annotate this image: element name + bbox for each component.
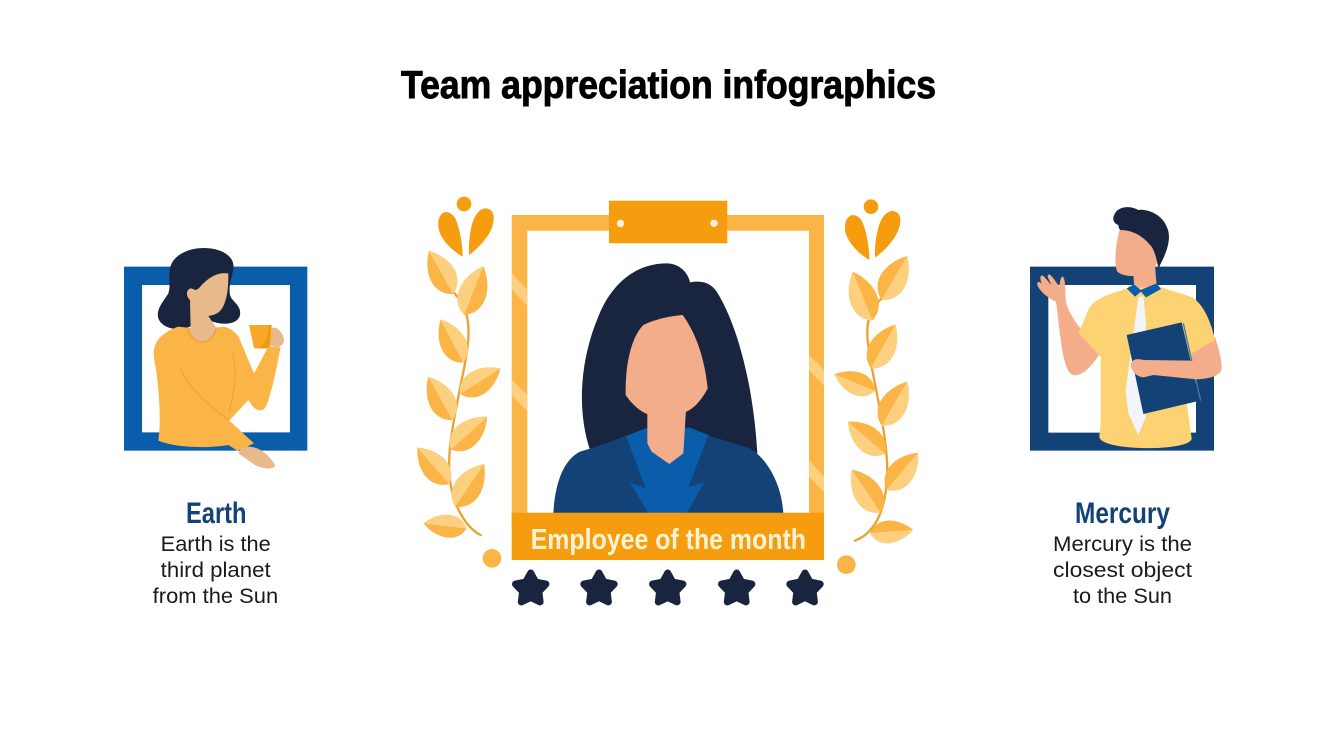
text block: Earth description: from the Sun <box>153 585 278 608</box>
text block: Earth description: Earth is the <box>161 533 271 556</box>
text block: Earth description <box>153 533 278 608</box>
panel: Mercury <box>1030 207 1222 608</box>
panel: Earth <box>124 248 307 608</box>
illustration: woman with cup in frame <box>124 248 307 469</box>
five star rating <box>516 573 820 602</box>
illustration: man with folder in frame <box>1030 207 1222 451</box>
left laurel wreath <box>408 197 507 568</box>
clip at top of frame <box>609 201 727 243</box>
text block: Mercury description <box>1053 533 1192 608</box>
text block: Mercury description: closest object <box>1053 559 1192 582</box>
illustration: employee portrait <box>553 263 783 513</box>
text block: Earth description: third planet <box>161 559 271 582</box>
title: Team appreciation infographics <box>401 64 936 107</box>
heading: Mercury: Mercury <box>1075 497 1170 530</box>
panel: Employee of the month <box>408 197 928 602</box>
banner: Employee of the month <box>531 524 806 556</box>
text block: Mercury description: Mercury is the <box>1053 533 1192 556</box>
text block: Mercury description: to the Sun <box>1073 585 1172 608</box>
banner <box>512 513 824 560</box>
heading: Earth: Earth <box>186 497 246 530</box>
picture frame <box>512 215 824 525</box>
right laurel wreath <box>830 199 928 574</box>
